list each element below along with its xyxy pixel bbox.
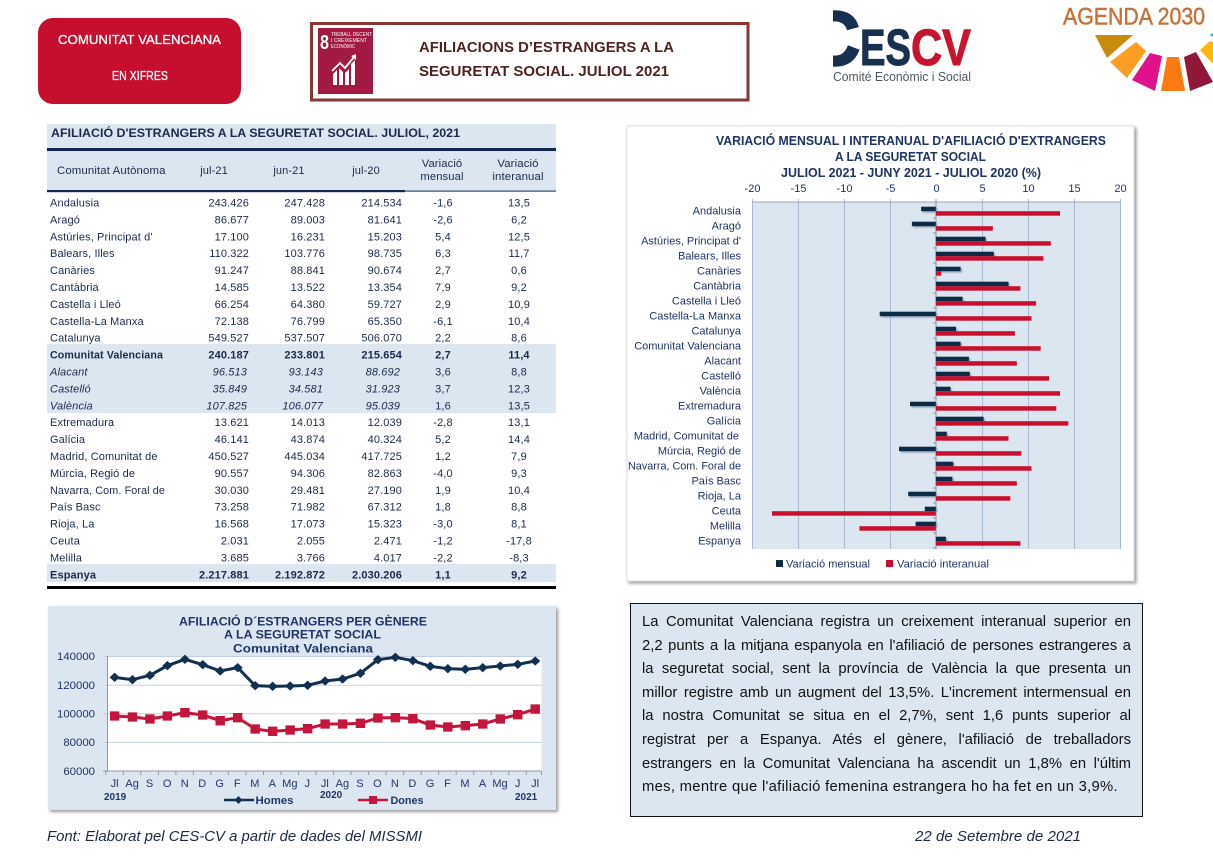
- text block: summary commentary: estrangers en la Comunitat Valenciana ha ascendit un 1,8% en l'últim: [642, 756, 1131, 772]
- table rows: [49, 198, 532, 581]
- text block: summary commentary: millor registre amb un augment del 13,5%. L'increment intermensual en: [642, 685, 1131, 701]
- table rows: 90.557: [215, 468, 249, 480]
- year labels: 2019: [104, 792, 127, 803]
- table rows: 88.841: [291, 265, 325, 277]
- table rows: 5,4: [435, 231, 451, 243]
- icon: SDG 8 decent work and economic growth: 8: [320, 32, 329, 54]
- table title band: [47, 124, 556, 148]
- table rows: 10,4: [508, 316, 530, 328]
- chart title: [179, 616, 427, 656]
- logo: CES CV: CV: [911, 19, 971, 76]
- table rows: Múrcia, Regió de: [50, 468, 135, 480]
- table rows: Catalunya: [50, 333, 101, 345]
- legend: Dones: [390, 795, 424, 807]
- category labels: [628, 206, 742, 548]
- x axis labels: A: [269, 778, 277, 790]
- table rows: 450.527: [208, 451, 249, 463]
- table rows: 67.312: [368, 502, 402, 514]
- table rows: -2,6: [433, 214, 453, 226]
- table rows: Alacant: [49, 366, 88, 378]
- chart title: JULIOL 2021 - JUNY 2021 - JULIOL 2020 (%): [781, 166, 1041, 180]
- x axis labels: Jl: [531, 778, 539, 790]
- top axis labels: 10: [1022, 183, 1035, 195]
- table rows: 30.030: [215, 485, 249, 497]
- text block: summary commentary: la nostra Comunitat se situa en el 2,7%, sent 1,6 punts superior al: [642, 708, 1131, 724]
- table rows: 103.776: [284, 248, 325, 260]
- top axis labels: [745, 183, 1127, 195]
- table rows: 13.354: [368, 282, 402, 294]
- bar chart panel: monthly and yearly variation: [627, 126, 1134, 581]
- x axis labels: A: [479, 778, 487, 790]
- category labels: Aragó: [712, 220, 741, 232]
- table rows: Melilla: [50, 552, 83, 564]
- icon: SDG 8 decent work and economic growth: [318, 28, 373, 94]
- category labels: Alacant: [704, 356, 741, 368]
- category labels: Catalunya: [691, 326, 742, 338]
- top axis labels: 15: [1068, 183, 1081, 195]
- chart title: VARIACIÓ MENSUAL I INTERANUAL D'AFILIACIÓ D'EXTRANGERS: [716, 133, 1106, 148]
- chart title: AFILIACIÓ D´ESTRANGERS PER GÈNERE: [179, 616, 427, 628]
- line: Homes: [110, 653, 540, 691]
- table rows: 5,2: [435, 434, 451, 446]
- table title band: AFILIACIÓ D'ESTRANGERS A LA SEGURETAT SOCIAL. JULIOL, 2021: [51, 125, 460, 140]
- x axis labels: S: [146, 778, 153, 790]
- table rows: 240.187: [208, 350, 249, 362]
- table rows: 110.322: [209, 248, 249, 260]
- table rows: 66.254: [215, 299, 249, 311]
- x axis labels: J: [515, 778, 520, 790]
- category labels: Extremadura: [678, 400, 742, 412]
- table rows: 82.863: [368, 468, 402, 480]
- table rows: 1,9: [435, 485, 451, 497]
- year labels: 2021: [515, 792, 538, 803]
- table rows: 214.534: [361, 198, 402, 210]
- table rows: 90.674: [368, 265, 402, 277]
- x axis labels: N: [391, 778, 399, 790]
- table rows: 14.585: [215, 282, 249, 294]
- table rows: 40.324: [368, 434, 402, 446]
- table rows: 16.568: [215, 519, 249, 531]
- category labels: Andalusia: [693, 206, 742, 218]
- table column headers: mensual: [420, 171, 464, 183]
- x axis labels: N: [181, 778, 189, 790]
- table rows: Balears, Illes: [50, 248, 115, 260]
- table rows: Galícia: [50, 434, 86, 446]
- table rows: Comunitat Valenciana: [50, 350, 164, 362]
- bars: variació mensual: [880, 207, 1008, 541]
- table rows: 10,9: [508, 299, 530, 311]
- x axis labels: Ag: [125, 778, 139, 790]
- top axis labels: -20: [745, 183, 760, 195]
- x axis labels: O: [163, 778, 172, 790]
- table rows: 95.039: [366, 400, 400, 412]
- table rows: 1,6: [435, 400, 451, 412]
- table rows: 91.247: [215, 265, 249, 277]
- table rows: 7,9: [435, 282, 451, 294]
- top axis labels: 20: [1114, 183, 1127, 195]
- y axis labels: 60000: [63, 766, 95, 778]
- plot area: [103, 656, 542, 775]
- table column headers: jul-21: [199, 165, 228, 177]
- table rows: 46.141: [215, 434, 249, 446]
- table rows: 13,5: [508, 400, 530, 412]
- table rows: 8,8: [511, 502, 527, 514]
- category labels: Astúries, Principat d': [641, 236, 741, 248]
- top axis labels: -10: [837, 183, 852, 195]
- x axis labels: M: [460, 778, 470, 790]
- y axis labels: 140000: [57, 651, 95, 663]
- table rows: 12,3: [508, 383, 530, 395]
- table rows: 7,9: [511, 451, 527, 463]
- x axis labels: G: [215, 778, 224, 790]
- table rows: 233.801: [284, 350, 325, 362]
- table rows: 2.192.872: [275, 569, 325, 581]
- icon: SDG 8 decent work and economic growth: I CREIXEMENT: [331, 38, 367, 44]
- table rows: 2.031: [221, 536, 249, 548]
- table rows: Andalusia: [50, 198, 100, 210]
- line: Dones: [110, 704, 540, 736]
- x axis labels: Mg: [282, 778, 297, 790]
- table rows: 8,1: [511, 519, 527, 531]
- x axis labels: D: [198, 778, 206, 790]
- plot area: [752, 199, 1120, 549]
- table rows: 2.055: [297, 536, 325, 548]
- badge: Comunitat Valenciana en xifres: COMUNITAT VALENCIANA: [58, 32, 221, 47]
- category labels: Balears, Illes: [678, 250, 741, 262]
- table rows: Astúries, Principat d': [50, 231, 153, 243]
- icon: SDG colour wheel segments: [1095, 34, 1213, 91]
- table rows: 2,7: [435, 265, 451, 277]
- table rows: 3,7: [435, 383, 451, 395]
- table rows: 98.735: [368, 248, 402, 260]
- table rows: Navarra, Com. Foral de: [50, 485, 165, 497]
- table rows: 16.231: [291, 231, 325, 243]
- x axis labels: G: [426, 778, 434, 790]
- category labels: Castella i Lleó: [672, 296, 741, 308]
- table rows: 17.073: [291, 519, 325, 531]
- icon: SDG 8 decent work and economic growth: TREBALL DECENT: [331, 32, 372, 38]
- x axis labels: S: [356, 778, 364, 790]
- table rows: 13.522: [291, 282, 325, 294]
- table rows: -2,2: [433, 552, 453, 564]
- x axis labels: Jl: [321, 778, 329, 790]
- category labels: Castella-La Manxa: [649, 310, 742, 322]
- legend: Variació mensual: [786, 558, 870, 570]
- table rows: 8,8: [511, 366, 527, 378]
- x axis labels: F: [444, 778, 451, 790]
- x axis labels: F: [234, 778, 241, 790]
- table rows: 14,4: [508, 434, 530, 446]
- bars: variació interanual: [772, 211, 1068, 546]
- logo: CES CV: ES: [860, 19, 911, 76]
- year labels: [104, 790, 538, 803]
- category labels: Galícia: [707, 416, 742, 428]
- table rows: 31.923: [366, 383, 401, 395]
- text block: summary commentary: 2,2 punts a la mitjana espanyola en l'afiliació de persones estrangeres a: [642, 638, 1131, 654]
- logo: CES CV: Comité Econòmic i Social: [833, 70, 971, 84]
- chart title: Comunitat Valenciana: [233, 644, 374, 656]
- table rows: Castella i Lleó: [50, 299, 121, 311]
- table rows: Rioja, La: [50, 519, 95, 531]
- top axis labels: 0: [933, 183, 940, 195]
- x axis labels: Jl: [111, 778, 119, 790]
- table rows: 73.258: [215, 502, 249, 514]
- table rows: 107.825: [206, 400, 248, 412]
- highlight bands: Comunitat Valenciana and Espanya: [47, 344, 556, 582]
- table rows: 445.034: [284, 451, 325, 463]
- table rows: 11,4: [508, 350, 530, 362]
- top axis labels: -15: [791, 183, 806, 195]
- table rows: 6,3: [435, 248, 451, 260]
- table rows: 14.013: [291, 417, 325, 429]
- table rows: -6,1: [433, 316, 453, 328]
- table rows: 215.654: [361, 350, 403, 362]
- heading: page title: AFILIACIONS D’ESTRANGERS A LA: [419, 40, 675, 56]
- line chart panel: affiliation by gender: [48, 606, 556, 810]
- table rows: 13.621: [215, 417, 249, 429]
- table rows: 86.677: [215, 214, 249, 226]
- y axis labels: 80000: [63, 737, 95, 749]
- table rows: -2,8: [433, 417, 453, 429]
- chart title: [716, 133, 1106, 180]
- legend: Homes: [256, 795, 294, 807]
- table rows: 3.685: [221, 552, 249, 564]
- table rows: 247.428: [284, 198, 325, 210]
- table rows: -1,2: [433, 536, 453, 548]
- table rows: 12.039: [368, 417, 402, 429]
- table rows: 27.190: [368, 485, 402, 497]
- chart title: A LA SEGURETAT SOCIAL: [224, 630, 381, 642]
- table rows: Castelló: [50, 383, 91, 395]
- table rows: 537.507: [284, 333, 325, 345]
- table column headers: interanual: [492, 171, 544, 183]
- table rows: 4.017: [374, 552, 402, 564]
- table rows: 243.426: [208, 198, 249, 210]
- category labels: Múrcia, Regió de: [658, 446, 741, 458]
- table rows: 64.380: [291, 299, 325, 311]
- table rows: 10,4: [508, 485, 530, 497]
- table rows: 15.323: [368, 519, 402, 531]
- table rows: Castella-La Manxa: [50, 316, 145, 328]
- text block: summary commentary: registrat per a Espanya. Atés el gènere, l'afiliació de treballadors: [642, 732, 1131, 748]
- category labels: Navarra, Com. Foral de: [628, 460, 741, 472]
- table rows: 1,8: [435, 502, 451, 514]
- x axis labels: Ag: [336, 778, 349, 790]
- x axis labels: [111, 778, 539, 790]
- table rows: 6,2: [511, 214, 527, 226]
- table rows: 8,6: [511, 333, 527, 345]
- table rows: València: [50, 400, 93, 412]
- x axis labels: J: [305, 778, 310, 790]
- text block: summary commentary: mes, mentre que l'afiliació femenina estrangera ho ha fet en un 3,9%.: [642, 779, 1118, 795]
- table rows: 93.143: [289, 366, 324, 378]
- table rows: Madrid, Comunitat de: [50, 451, 158, 463]
- table rows: 506.070: [361, 333, 402, 345]
- chart title: A LA SEGURETAT SOCIAL: [835, 150, 986, 164]
- logo: CES CV: [833, 10, 972, 81]
- category labels: Espanya: [698, 536, 742, 548]
- x axis labels: M: [250, 778, 259, 790]
- table rows: 94.306: [291, 468, 325, 480]
- table rows: Extremadura: [50, 417, 115, 429]
- table rows: Espanya: [50, 569, 97, 581]
- category labels: València: [700, 386, 742, 398]
- table rows: 9,2: [511, 569, 527, 581]
- legend: Variació interanual: [897, 558, 989, 570]
- text block: summary commentary: La Comunitat Valenciana registra un creixement interanual superior en: [642, 614, 1131, 630]
- table rows: 106.077: [282, 400, 324, 412]
- table rows: 2,2: [435, 333, 451, 345]
- x axis labels: O: [373, 778, 382, 790]
- category labels: Comunitat Valenciana: [634, 340, 742, 352]
- heading: page title: [419, 40, 675, 80]
- table rows: 29.481: [291, 485, 325, 497]
- table rows: 9,2: [511, 282, 527, 294]
- table rows: 11,7: [508, 248, 530, 260]
- table rows: 43.874: [291, 434, 325, 446]
- badge: Comunitat Valenciana en xifres: [38, 18, 241, 104]
- x axis labels: Mg: [492, 778, 508, 790]
- table rows: -17,8: [506, 536, 532, 548]
- table rows: 59.727: [368, 299, 402, 311]
- text block: summary commentary: la seguretat social, sent la província de València la que presenta un: [642, 661, 1131, 677]
- table rows: País Basc: [50, 502, 101, 514]
- table rows: 13,5: [508, 198, 530, 210]
- table rows: 417.725: [361, 451, 402, 463]
- logo: Agenda 2030: [1063, 4, 1213, 91]
- legend: [224, 795, 424, 807]
- footer: source: Font: Elaborat pel CES-CV a partir de dades del MISSMI: [47, 828, 422, 845]
- y axis labels: 120000: [57, 680, 95, 692]
- category labels: Rioja, La: [698, 490, 742, 502]
- table column headers: [47, 148, 556, 192]
- top axis labels: -5: [886, 183, 895, 195]
- table column headers: Comunitat Autònoma: [57, 165, 166, 177]
- category labels: Ceuta: [712, 506, 742, 518]
- table rows: -3,0: [433, 519, 453, 531]
- text block: summary commentary: [630, 603, 1143, 817]
- table column headers: jun-21: [272, 165, 305, 177]
- table rows: 88.692: [366, 366, 400, 378]
- footer: date: 22 de Setembre de 2021: [914, 828, 1081, 845]
- table rows: 65.350: [368, 316, 402, 328]
- category labels: Madrid, Comunitat de: [634, 430, 739, 442]
- top axis labels: 5: [979, 183, 986, 195]
- category labels: Castelló: [701, 370, 741, 382]
- table: foreign affiliation by autonomous community: [47, 124, 556, 589]
- table column headers: jul-20: [351, 165, 380, 177]
- table rows: 2.217.881: [199, 569, 249, 581]
- y axis labels: 100000: [57, 708, 95, 720]
- table rows: 13,1: [508, 417, 530, 429]
- table rows: 1,1: [435, 569, 451, 581]
- table rows: 17.100: [215, 231, 249, 243]
- table rows: 96.513: [213, 366, 248, 378]
- table rows: 35.849: [213, 383, 247, 395]
- icon: SDG 8 decent work and economic growth: ECONÒMIC: [331, 43, 355, 50]
- table rows: Ceuta: [50, 536, 81, 548]
- table rows: 549.527: [208, 333, 249, 345]
- header title box: [312, 24, 748, 100]
- table rows: 2.471: [374, 536, 402, 548]
- heading: page title: SEGURETAT SOCIAL. JULIOL 2021: [419, 64, 669, 80]
- table rows: 89.003: [291, 214, 325, 226]
- badge: Comunitat Valenciana en xifres: EN XIFRES: [112, 69, 168, 83]
- year labels: 2020: [320, 790, 343, 801]
- table rows: 15.203: [368, 231, 402, 243]
- table rows: 0,6: [511, 265, 527, 277]
- table rows: 3,6: [435, 366, 451, 378]
- category labels: Melilla: [710, 520, 742, 532]
- table rows: Canàries: [50, 265, 95, 277]
- table rows: Aragó: [50, 214, 80, 226]
- table column headers: Variació: [497, 158, 539, 170]
- table rows: Cantàbria: [50, 282, 100, 294]
- table rows: 72.138: [215, 316, 249, 328]
- category labels: Cantàbria: [693, 280, 742, 292]
- table rows: -4,0: [433, 468, 453, 480]
- table rows: 1,2: [435, 451, 451, 463]
- table rows: 34.581: [289, 383, 323, 395]
- table rows: 76.799: [291, 316, 325, 328]
- table rows: 2.030.206: [352, 569, 402, 581]
- category labels: País Basc: [691, 476, 741, 488]
- table rows: 71.982: [291, 502, 325, 514]
- legend: [776, 558, 989, 570]
- table rows: 9,3: [511, 468, 527, 480]
- x axis labels: D: [408, 778, 416, 790]
- table rows: 81.641: [368, 214, 402, 226]
- table rows: -8,3: [509, 552, 529, 564]
- table rows: 3.766: [297, 552, 325, 564]
- table column headers: Variació: [422, 158, 462, 170]
- table rows: 2,7: [435, 350, 451, 362]
- category labels: Canàries: [697, 266, 741, 278]
- table rows: 2,9: [435, 299, 451, 311]
- table rows: -1,6: [433, 198, 453, 210]
- y axis labels: [57, 651, 95, 778]
- table rows: 12,5: [508, 231, 530, 243]
